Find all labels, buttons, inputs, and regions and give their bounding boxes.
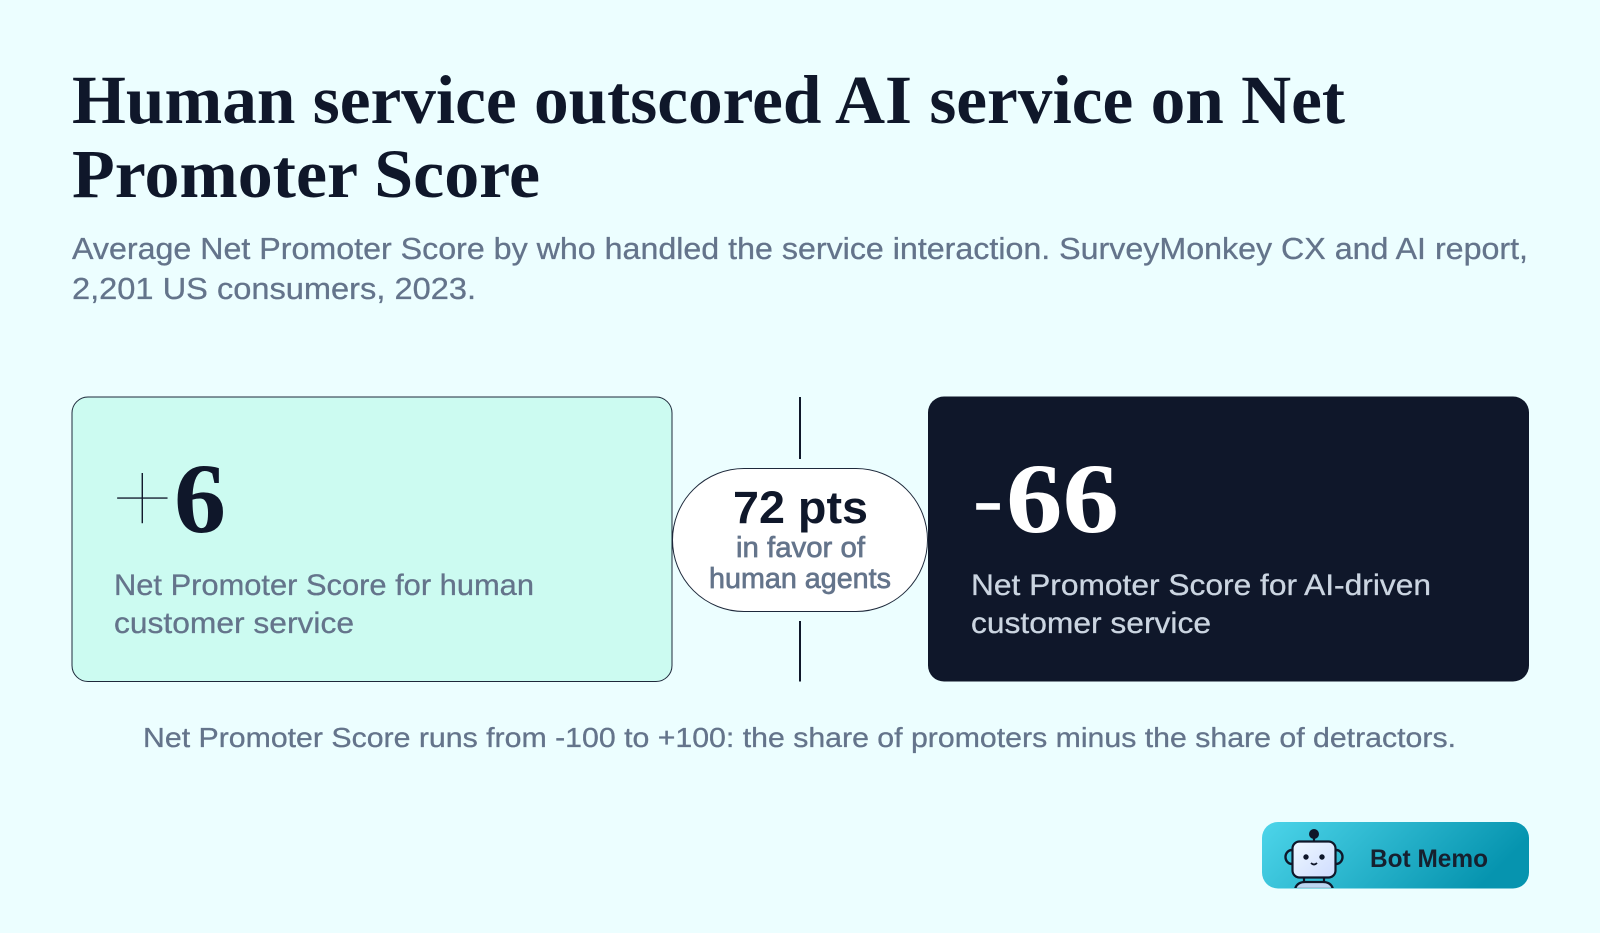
difference caption bbox=[709, 532, 891, 595]
human score description bbox=[114, 569, 534, 640]
title bbox=[72, 62, 1345, 212]
subtitle: Average Net Promoter Score by who handled the service interaction. SurveyMonkey CX and AI report, bbox=[72, 231, 1528, 266]
AI score description: customer service bbox=[971, 607, 1211, 640]
panel: human score card bbox=[72, 397, 672, 682]
difference value: 72 pts bbox=[733, 482, 868, 533]
panel: AI score card bbox=[928, 396, 1529, 682]
AI score description: Net Promoter Score for AI-driven bbox=[971, 569, 1431, 602]
difference caption: in favor of bbox=[736, 532, 866, 564]
difference caption: human agents bbox=[709, 563, 891, 595]
title: Human service outscored AI service on Net bbox=[72, 62, 1345, 138]
icon: robot bbox=[1286, 829, 1342, 889]
connector line top bbox=[799, 397, 801, 459]
logo badge bbox=[1262, 822, 1529, 889]
subtitle: 2,201 US consumers, 2023. bbox=[72, 271, 476, 306]
human score value bbox=[109, 432, 226, 563]
human score description: customer service bbox=[114, 607, 354, 640]
human score value: 6 bbox=[174, 443, 226, 554]
footnote: Net Promoter Score runs from -100 to +100: the share of promoters minus the share of detractors. bbox=[143, 722, 1456, 753]
AI score value: - bbox=[972, 437, 1004, 556]
title: Promoter Score bbox=[72, 136, 540, 212]
brand name: Bot Memo bbox=[1370, 845, 1488, 873]
human score description: Net Promoter Score for human bbox=[114, 569, 534, 602]
subtitle bbox=[72, 231, 1528, 306]
callout: points difference bbox=[672, 468, 928, 612]
AI score value bbox=[972, 437, 1119, 556]
AI score value: 66 bbox=[1006, 443, 1119, 554]
human score value: + bbox=[109, 432, 176, 563]
connector line bottom bbox=[799, 621, 801, 682]
AI score description bbox=[971, 569, 1431, 640]
